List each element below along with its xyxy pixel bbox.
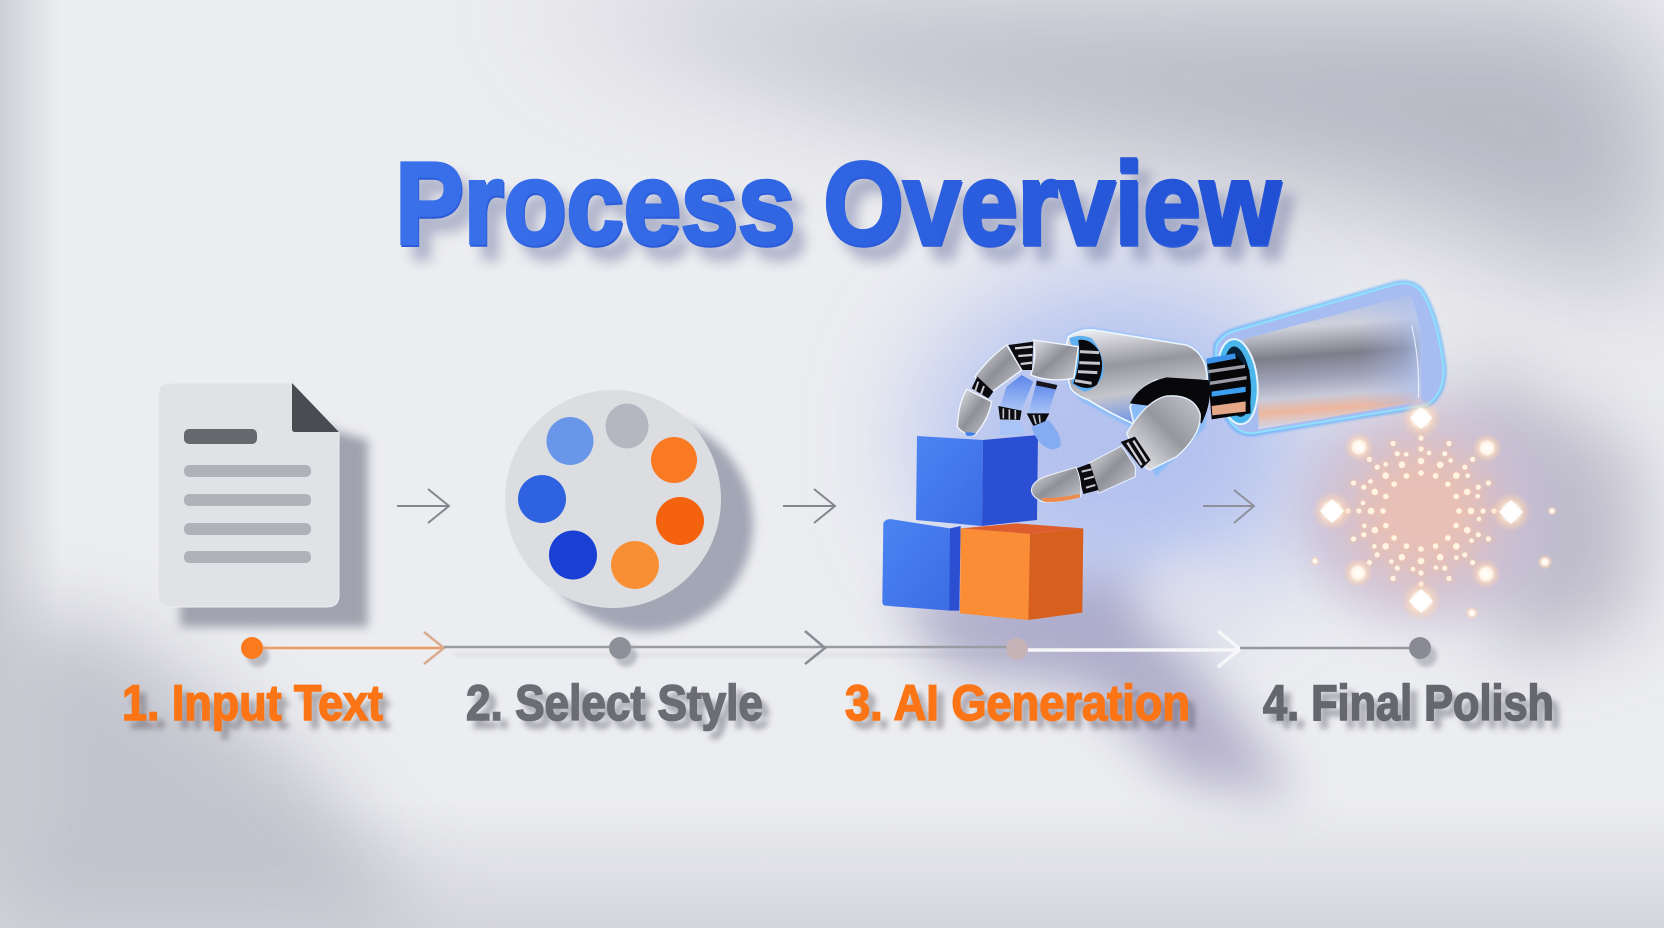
arrow: AI to polish: [1203, 490, 1254, 523]
icon: colour palette: [505, 390, 753, 632]
step marker 3: [1006, 638, 1028, 660]
palm: [1068, 330, 1207, 473]
thumb: [1031, 396, 1200, 502]
label: step 4: 4. Final Polish: [1263, 675, 1554, 731]
forearm sleeve: [1207, 283, 1443, 433]
icon: building blocks: [882, 435, 1083, 620]
label: step 3: 3. AI Generation: [845, 675, 1190, 731]
label: step 2: 2. Select Style: [466, 675, 763, 731]
thumb joint: [1130, 377, 1210, 423]
step marker 1: [241, 637, 263, 659]
timeline: [241, 631, 1437, 667]
step marker 4: [1409, 637, 1431, 659]
wrist cables: [1207, 353, 1251, 419]
icon: robot arm: [957, 283, 1443, 502]
title: Process Overview: [395, 138, 1281, 268]
arrow: palette to AI: [783, 489, 835, 523]
label: step 1: 1. Input Text: [122, 675, 383, 731]
sparkle burst: [1310, 398, 1557, 621]
palm joint: [1069, 336, 1103, 392]
icon: document: [158, 383, 368, 627]
index finger: [957, 340, 1078, 436]
arrow: document to palette: [397, 489, 449, 523]
step marker 2: [609, 637, 631, 659]
blue fingers: [998, 375, 1061, 449]
